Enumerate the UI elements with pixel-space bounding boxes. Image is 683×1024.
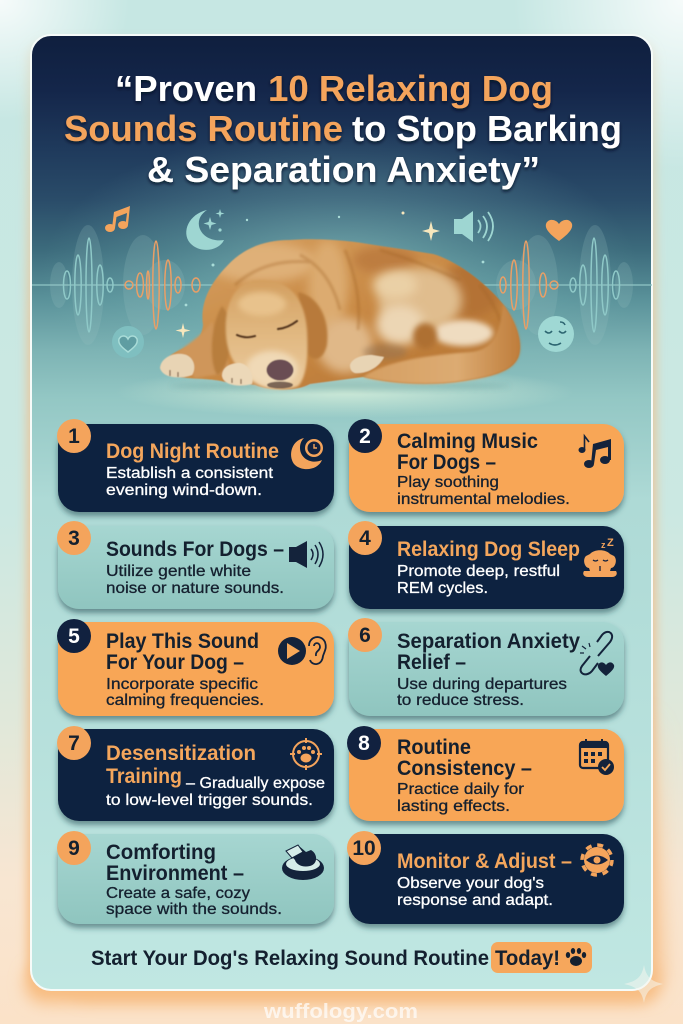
title 1: Dog Night Routine	[106, 439, 279, 463]
title 8: Routine	[397, 735, 471, 759]
body 9: space with the sounds.	[106, 901, 282, 918]
number badges	[57, 419, 382, 865]
dog head	[226, 280, 307, 389]
body 1: Establish a consistent	[106, 465, 274, 482]
title 6: Relief –	[397, 650, 466, 674]
title 2: Calming Music	[397, 429, 538, 453]
title: to Stop Barking	[352, 108, 622, 149]
body 2	[397, 474, 570, 508]
call to action: Start Your Dog's Relaxing Sound Routine	[91, 946, 489, 970]
body 8	[397, 781, 525, 815]
dog nose	[266, 360, 294, 380]
body 2: Play soothing	[397, 474, 499, 491]
body 7	[106, 775, 325, 809]
icon: corner sparkle	[624, 965, 663, 1003]
card 2: Calming Music	[349, 424, 624, 512]
icon: heart	[546, 220, 572, 241]
title 4: Relaxing Dog Sleep	[397, 537, 580, 561]
icon: calendar check	[580, 739, 614, 775]
title 7: Desensitization	[106, 741, 256, 765]
title 2: For Dogs –	[397, 450, 496, 474]
dog foreleg	[175, 322, 232, 378]
title: Sounds Routine	[64, 108, 343, 149]
body 8: lasting effects.	[397, 798, 510, 815]
body 9: Create a safe, cozy	[106, 885, 250, 902]
body 7: – Gradually expose	[186, 775, 325, 792]
body 6: Use during departures	[397, 676, 567, 693]
title 9	[106, 840, 244, 885]
icon: heart circle	[112, 326, 144, 358]
body 1	[106, 465, 274, 499]
body 10: Observe your dog's	[397, 875, 544, 892]
title 8	[397, 735, 532, 780]
title 7	[106, 741, 256, 788]
icon: broken link and heart	[580, 632, 614, 676]
title: & Separation Anxiety”	[147, 149, 540, 190]
icon: sleeping dog	[583, 537, 617, 577]
icon: target paw	[290, 738, 322, 770]
watermark: wuffology.com	[263, 1001, 418, 1023]
number badges: 10	[352, 837, 376, 860]
body 9	[106, 885, 282, 918]
icon: music note	[105, 206, 130, 232]
number badges: 4	[359, 527, 371, 550]
title: “Proven	[115, 68, 257, 109]
body 2: instrumental melodies.	[397, 491, 570, 508]
title 9: Comforting	[106, 840, 216, 864]
card 9: Comforting Environment	[58, 834, 334, 924]
card 5: Play This Sound	[58, 622, 334, 716]
body 3: Utilize gentle white	[106, 563, 251, 580]
icon: play and ear	[278, 637, 326, 665]
title 7: Training	[106, 764, 182, 788]
title: 10 Relaxing Dog	[268, 68, 553, 109]
call to action: Today!	[495, 946, 560, 970]
number badges: 5	[68, 625, 80, 648]
icon: speaker	[454, 211, 493, 242]
card 10: Monitor & Adjust	[349, 834, 624, 924]
icon: sleeping dog: z	[601, 540, 606, 550]
body 5: calming frequencies.	[106, 692, 264, 709]
body 4	[397, 563, 560, 597]
icon: moon with clock	[291, 438, 323, 469]
icon: music notes	[578, 436, 611, 468]
title 3: Sounds For Dogs –	[106, 537, 284, 561]
title 5: Play This Sound	[106, 629, 259, 653]
number badges: 6	[359, 624, 371, 647]
number badges: 3	[68, 527, 80, 550]
title 9: Environment –	[106, 861, 244, 885]
icon: sparkle and dots	[176, 212, 484, 338]
body 5	[106, 676, 264, 709]
dog left ear	[212, 306, 232, 375]
number badges: 8	[358, 732, 370, 755]
title 6	[397, 629, 580, 674]
body 8: Practice daily for	[397, 781, 525, 798]
body 7: to low-level trigger sounds.	[106, 792, 313, 809]
body 6: to reduce stress.	[397, 692, 524, 709]
title 10: Monitor & Adjust –	[397, 849, 572, 873]
illustration: sleeping golden retriever	[160, 239, 520, 391]
title	[64, 68, 622, 190]
icon: speaker	[289, 541, 323, 568]
title 8: Consistency –	[397, 756, 532, 780]
card 4: Relaxing Dog Sleep	[349, 526, 624, 609]
title 5	[106, 629, 259, 674]
dog right ear	[298, 292, 327, 359]
icon: sleeping dog: Z	[607, 537, 614, 549]
body 1: evening wind-down.	[106, 482, 262, 499]
card 7: Desensitization Training	[58, 729, 334, 821]
card 3: Sounds For Dogs	[58, 526, 334, 609]
icon: calm face	[538, 316, 574, 352]
body 10	[397, 875, 553, 909]
icon: paw	[566, 948, 586, 966]
title 2	[397, 429, 538, 474]
body 3: noise or nature sounds.	[106, 580, 284, 597]
title 5: For Your Dog –	[106, 650, 244, 674]
dog paws	[160, 354, 194, 377]
icon: gear eye	[582, 845, 612, 875]
body 4: Promote deep, restful	[397, 563, 560, 580]
body 5: Incorporate specific	[106, 676, 258, 693]
sound wave left and right	[32, 225, 652, 345]
body 10: response and adapt.	[397, 892, 553, 909]
number badges: 2	[359, 425, 371, 448]
body 6	[397, 676, 567, 709]
dog tail	[363, 304, 520, 384]
body 4: REM cycles.	[397, 580, 488, 597]
call to action	[91, 942, 592, 973]
number badges: 7	[68, 732, 80, 755]
icon: moon and stars	[186, 209, 224, 250]
title 6: Separation Anxiety	[397, 629, 580, 653]
card 1: Dog Night Routine	[58, 424, 334, 512]
number badges: 9	[68, 837, 80, 860]
icon: dog bed	[282, 845, 324, 880]
number badges: 1	[68, 425, 80, 448]
dog eyes	[237, 321, 297, 337]
card 8: Routine Consistency	[349, 729, 624, 821]
body 3	[106, 563, 284, 597]
card 6: Separation Anxiety Relief	[349, 622, 624, 716]
